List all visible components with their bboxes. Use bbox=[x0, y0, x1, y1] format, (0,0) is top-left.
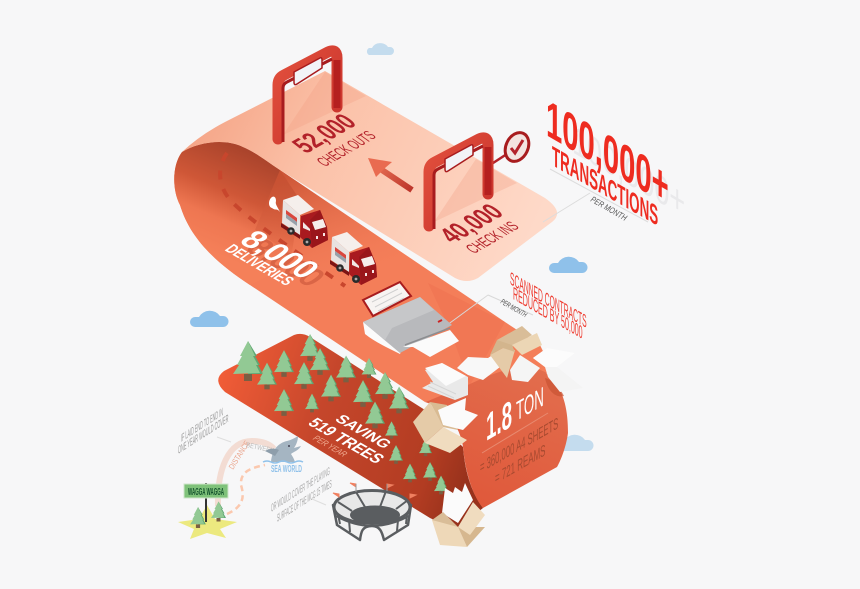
stat: 40,000 check ins bbox=[432, 199, 523, 256]
stat: 100,000+ transactions: TRANSACTIONS bbox=[552, 140, 658, 232]
label: per month: PER MONTH bbox=[589, 194, 629, 223]
paper sheet middle bbox=[457, 352, 500, 380]
cloud: top bbox=[367, 43, 394, 55]
dashed route bbox=[227, 465, 265, 514]
trees bbox=[233, 334, 448, 494]
text: WAGGA WAGGA bbox=[188, 487, 224, 498]
text: ONE YEAR WOULD COVER bbox=[178, 413, 228, 457]
stat: saving 519 trees: SAVING bbox=[331, 412, 395, 451]
stat: sheets and reams: = 360,000 A4 SHEETS bbox=[480, 414, 558, 477]
stat: saving 519 trees: PER YEAR bbox=[310, 435, 349, 459]
stat: 100,000+ transactions: 100,000+ bbox=[572, 117, 685, 226]
stat: 1.8 ton: 1.8 bbox=[486, 393, 512, 450]
label: per month contracts: PER MONTH bbox=[499, 297, 529, 319]
gate shadow: check ins bbox=[434, 159, 517, 222]
exhaust puff bbox=[269, 197, 280, 212]
stat: sheets and reams bbox=[480, 414, 558, 488]
stat: 1.8 ton: TON bbox=[516, 381, 544, 427]
stat: 8,000 deliveries: 8,000 bbox=[238, 233, 334, 292]
paper sheets on top box bbox=[510, 355, 540, 382]
stat: 8,000 deliveries: DELIVERIES bbox=[221, 241, 298, 288]
text: SURFACE OF THE MCG 15 TIMES bbox=[277, 478, 332, 525]
text: SCANNED CONTRACTS bbox=[510, 268, 587, 332]
stadium bbox=[333, 483, 416, 540]
text: IF LAID END TO END IN bbox=[181, 406, 223, 445]
sign: check ins bbox=[445, 145, 473, 172]
stat: 40,000 check ins: CHECK INS bbox=[461, 218, 523, 256]
stat: 40,000 check ins: 40,000 bbox=[432, 199, 510, 248]
stat: sheets and reams: = 721 REAMS bbox=[495, 441, 545, 488]
stat: 100,000+ transactions bbox=[546, 89, 685, 232]
star bbox=[178, 505, 237, 539]
stat: 52,000 check outs: CHECK OUTS bbox=[312, 128, 380, 169]
note: laid end to end bbox=[178, 406, 228, 457]
panel: check in / check out band bbox=[182, 71, 557, 281]
stat: 52,000 check outs bbox=[285, 109, 380, 169]
truck 2 bbox=[330, 232, 377, 285]
box: top bbox=[490, 326, 542, 378]
connector and check icon bbox=[490, 129, 533, 165]
tree: star right bbox=[211, 502, 226, 522]
paper stack left bbox=[422, 363, 468, 400]
arc distance bbox=[218, 441, 274, 506]
leader lines: transactions bbox=[543, 169, 648, 222]
box: middle bbox=[413, 398, 478, 453]
road dashes bbox=[220, 153, 345, 286]
stat: 52,000 check outs: 52,000 bbox=[285, 109, 363, 158]
panel: 1.8 ton wall bbox=[425, 368, 568, 508]
gate: check outs bbox=[278, 51, 337, 142]
text: REDUCED BY 50,000 bbox=[513, 283, 583, 343]
panel: tree band bbox=[218, 334, 483, 530]
leader lines: scanned contracts bbox=[443, 295, 533, 328]
stat: scanned contracts reduced bbox=[510, 268, 587, 343]
stat: saving 519 trees: 519 TREES bbox=[304, 415, 389, 466]
gate: check ins bbox=[429, 138, 488, 229]
cloud: left bbox=[190, 311, 228, 327]
dolphin bbox=[263, 436, 303, 463]
label: distance between: DISTANCE bbox=[227, 439, 252, 471]
stat: 100,000+ transactions: 100,000+ bbox=[546, 89, 669, 217]
cloud: lower right bbox=[555, 435, 594, 451]
stat: 8,000 deliveries: 8,000 bbox=[232, 225, 328, 284]
sign: check outs bbox=[294, 58, 322, 85]
panel: deliveries band bbox=[174, 142, 553, 402]
gate shadow: check outs bbox=[283, 72, 366, 135]
text: OR WOULD COVER THE PLAYING bbox=[271, 465, 330, 515]
cloud: right middle bbox=[549, 257, 588, 273]
paper sheets right bbox=[533, 348, 583, 392]
tree: star left bbox=[190, 507, 206, 528]
label: sea world: SEA WORLD bbox=[271, 464, 302, 475]
arrow bbox=[368, 158, 412, 190]
stat: saving 519 trees bbox=[304, 412, 395, 466]
wall crease bbox=[545, 378, 564, 396]
box: bottom bbox=[432, 483, 485, 547]
truck 1 bbox=[281, 195, 328, 248]
printer bbox=[363, 282, 459, 357]
label: between: BETWEEN bbox=[246, 442, 274, 455]
note: MCG bbox=[271, 465, 332, 525]
signpost bbox=[184, 483, 228, 522]
